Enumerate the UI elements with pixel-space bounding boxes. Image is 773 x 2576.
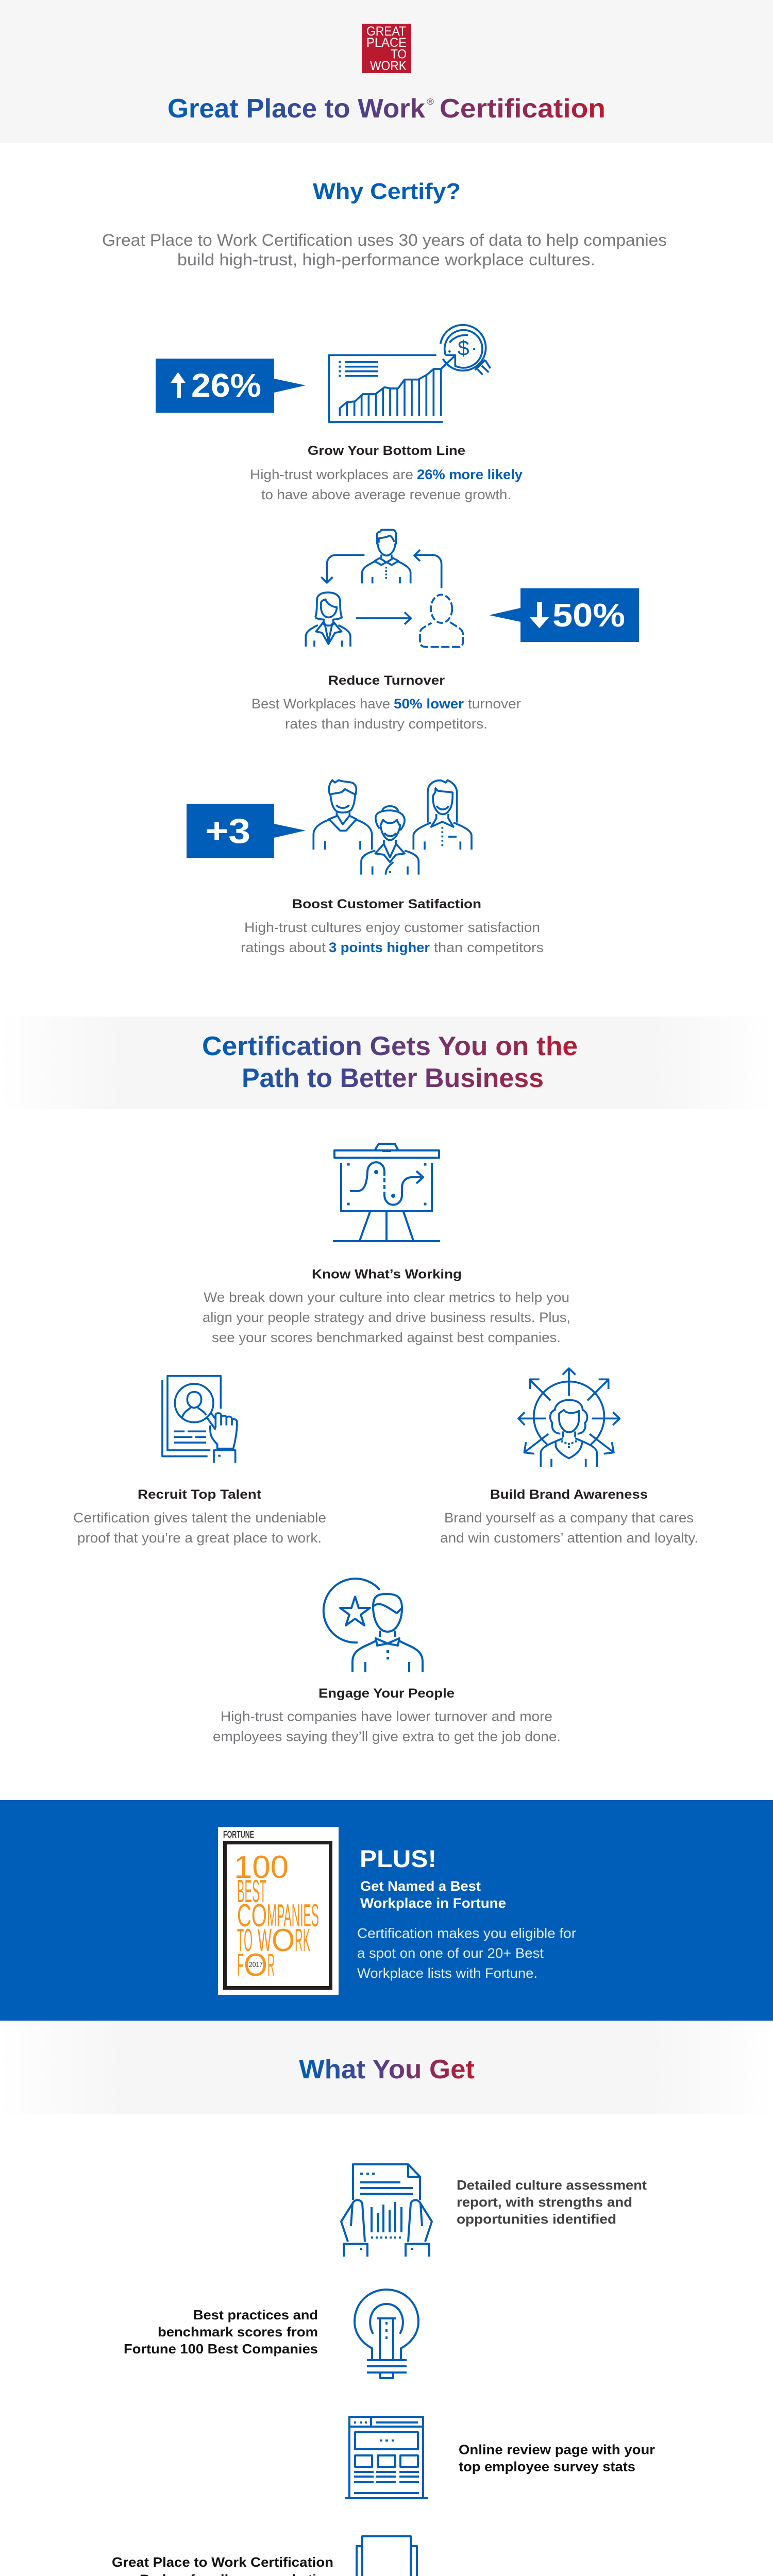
icon: light bulb — [355, 2290, 418, 2378]
title: Great Place to Work — [167, 94, 425, 124]
logo — [362, 24, 411, 73]
heading band: path to better business — [0, 1016, 773, 1109]
fortune cover: FORTUNE — [223, 1829, 254, 1840]
heading band: path to better business: Path to Better Business — [242, 1063, 544, 1093]
logo: GREAT — [366, 24, 406, 39]
block: recruit top talent — [73, 1487, 326, 1546]
text: detailed culture report — [457, 2177, 647, 2227]
callout: plus 3 — [187, 804, 306, 858]
fortune cover: O — [244, 1947, 267, 1983]
block: know what's working: Know What’s Working — [312, 1267, 462, 1282]
block: boost customer satisfaction: 3 points higher — [329, 940, 430, 955]
text: online review page — [459, 2442, 655, 2474]
plus text: Certification makes you eligible for — [357, 1926, 576, 1941]
fortune cover: R — [267, 1947, 275, 1983]
block: reduce turnover: Best Workplaces have — [251, 696, 390, 711]
block: boost customer satisfaction: ratings about — [241, 940, 326, 955]
block: build brand awareness: Brand yourself as a company that cares — [444, 1510, 694, 1526]
block: know what's working: align your people strategy and drive business results. Plus, — [203, 1310, 570, 1325]
icon: review web page — [345, 2417, 428, 2498]
block: grow your bottom line — [250, 444, 523, 502]
plus subheading: Get Named a Best — [360, 1878, 481, 1894]
heading band: what you get — [0, 2021, 773, 2114]
block: reduce turnover: 50% lower — [394, 696, 464, 711]
plus subheading — [360, 1878, 506, 1911]
panel: fortune plus — [0, 1800, 773, 2021]
plus text: Workplace lists with Fortune. — [357, 1965, 537, 1981]
fortune cover: TO — [237, 1923, 253, 1958]
icon: report held in hands — [341, 2164, 432, 2257]
block: recruit top talent: proof that you’re a great place to work. — [77, 1530, 322, 1546]
title: Certification — [440, 94, 606, 124]
icon: employee with star — [324, 1579, 423, 1672]
fortune cover: CO — [237, 1898, 267, 1934]
block: build brand awareness: and win customers’ attention and loyalty. — [440, 1530, 698, 1546]
callout: down 50 percent — [489, 588, 639, 642]
block: reduce turnover: Reduce Turnover — [328, 673, 445, 688]
block: build brand awareness — [440, 1487, 698, 1546]
fortune cover — [218, 1827, 339, 1995]
text: detailed culture report: opportunities identified — [457, 2211, 616, 2227]
plus text — [357, 1926, 576, 1981]
block: engage your people: Engage Your People — [318, 1686, 455, 1701]
callout: plus 3: +3 — [205, 811, 250, 851]
block: boost customer satisfaction: than competitors — [434, 940, 544, 955]
block: grow your bottom line: High-trust workplaces are — [250, 467, 413, 482]
text: best practices: benchmark scores from — [158, 2324, 318, 2340]
fortune cover: 100 — [234, 1850, 289, 1885]
plus text: a spot on one of our 20+ Best — [357, 1945, 544, 1961]
block: know what's working — [203, 1267, 570, 1345]
intro text — [102, 231, 667, 269]
logo: WORK — [370, 59, 407, 73]
title — [167, 94, 606, 124]
block: recruit top talent: Recruit Top Talent — [138, 1487, 262, 1502]
logo: PLACE — [366, 36, 407, 50]
block: grow your bottom line: Grow Your Bottom Line — [308, 444, 465, 458]
block: reduce turnover: rates than industry competitors. — [285, 716, 488, 732]
text: online review page: Online review page with your — [459, 2442, 655, 2458]
icon: resume and magnifier — [162, 1376, 237, 1463]
icon: chart with magnifier: $ — [458, 336, 469, 360]
fortune cover: RK — [295, 1923, 310, 1958]
icon: brand awareness arrows — [518, 1368, 619, 1467]
fortune cover: W — [258, 1923, 272, 1958]
callout: up 26 percent — [156, 359, 306, 413]
text: certification badge: Great Place to Work Certification — [112, 2554, 333, 2570]
icon: chart with magnifier — [329, 325, 491, 422]
intro text: build high-trust, high-performance workplace cultures. — [177, 250, 595, 269]
block: grow your bottom line: to have above average revenue growth. — [261, 487, 511, 502]
icon: three smiling people — [313, 780, 472, 875]
text: detailed culture report: Detailed culture assessment — [457, 2177, 647, 2193]
fortune cover: F — [237, 1947, 244, 1983]
callout: down 50 percent: 50% — [552, 597, 625, 634]
fortune cover: MPANIES — [267, 1898, 319, 1934]
heading: why certify: Why Certify? — [313, 179, 461, 204]
icon: turnover people cycle — [306, 530, 463, 647]
text: detailed culture report: report, with strengths and — [457, 2194, 632, 2210]
heading band: what you get: What You Get — [299, 2055, 475, 2084]
header panel — [0, 0, 773, 143]
block: boost customer satisfaction: Boost Customer Satifaction — [292, 897, 481, 911]
text: certification badge — [112, 2554, 333, 2576]
icon: certification badge — [357, 2536, 417, 2576]
block: reduce turnover — [251, 673, 521, 732]
plus heading: PLUS! — [360, 1845, 436, 1872]
block: boost customer satisfaction: High-trust cultures enjoy customer satisfaction — [244, 920, 540, 935]
icon: presentation board — [333, 1144, 440, 1241]
block: know what's working: We break down your culture into clear metrics to help you — [204, 1290, 569, 1305]
block: boost customer satisfaction — [241, 897, 544, 955]
logo: TO — [391, 47, 407, 62]
block: know what's working: see your scores benchmarked against best companies. — [212, 1330, 561, 1345]
intro text: Great Place to Work Certification uses 30 years of data to help companies — [102, 231, 667, 249]
block: build brand awareness: Build Brand Awareness — [490, 1487, 648, 1502]
fortune cover: O — [272, 1923, 295, 1958]
text: best practices: Fortune 100 Best Companies — [124, 2341, 318, 2357]
block: grow your bottom line: 26% more likely — [417, 467, 523, 482]
block: reduce turnover: turnover — [468, 696, 521, 711]
fortune cover: 2017 — [249, 1960, 263, 1969]
text: best practices — [124, 2307, 318, 2357]
text: best practices: Best practices and — [193, 2307, 318, 2323]
block: recruit top talent: Certification gives talent the undeniable — [73, 1510, 326, 1526]
fortune cover: BEST — [237, 1874, 266, 1909]
heading band: path to better business: Certification Gets You on the — [202, 1031, 578, 1061]
block: engage your people — [213, 1686, 561, 1744]
block: engage your people: employees saying they’ll give extra to get the job done. — [213, 1729, 561, 1744]
text: online review page: top employee survey stats — [459, 2459, 635, 2474]
plus subheading: Workplace in Fortune — [360, 1895, 506, 1911]
callout: up 26 percent: 26% — [191, 367, 261, 404]
block: engage your people: High-trust companies have lower turnover and more — [221, 1708, 552, 1724]
title: ® — [427, 97, 434, 107]
